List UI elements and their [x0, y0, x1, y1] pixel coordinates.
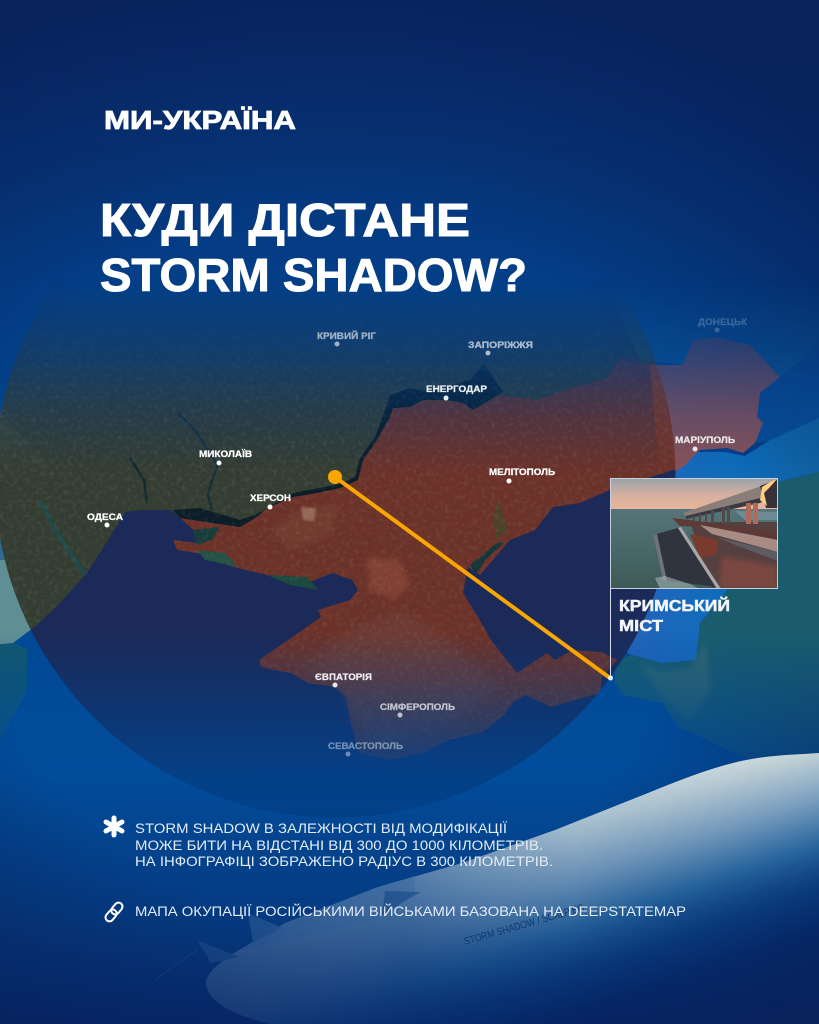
- city: Kherson: ХЕРСОН: [250, 493, 291, 504]
- logo: МИ-УКРАЇНА: [104, 107, 296, 135]
- Dnipro liman and Kakhovka reservoir: [172, 364, 503, 527]
- body seam: [352, 876, 415, 898]
- Taman and Kuban land: [615, 472, 819, 754]
- teal wetlands: [193, 527, 220, 545]
- tail fin: [248, 913, 283, 943]
- occupied east: [650, 337, 780, 480]
- north-east free land: [648, 323, 819, 377]
- callout label: [619, 596, 730, 635]
- city: Donetsk: [698, 317, 747, 332]
- city: Mykolaiv: МИКОЛАЇВ: [199, 449, 252, 460]
- city: Sevastopol: [328, 741, 403, 756]
- occupied south Ukraine and Crimea: [173, 358, 700, 760]
- note: range: [106, 818, 553, 869]
- icon: link: [104, 901, 124, 923]
- title: STORM SHADOW?: [100, 249, 527, 301]
- callout label: КРИМСЬКИЙ: [619, 596, 730, 615]
- rivers: [178, 413, 218, 510]
- map layer: outside strike radius: [0, 323, 819, 754]
- city: Simferopol: СІМФЕРОПОЛЬ: [380, 702, 455, 713]
- note text: НА ІНФОГРАФІЦІ ЗОБРАЖЕНО РАДІУС В 300 КІЛОМЕТРІВ.: [135, 854, 553, 869]
- city: Odesa: ОДЕСА: [87, 512, 123, 523]
- Sea of Azov: [627, 418, 819, 663]
- city: Odesa: [87, 512, 123, 528]
- rear fin: [197, 940, 239, 963]
- city: Mykolaiv: [199, 449, 252, 466]
- inscription on missile: STORM SHADOW / SCALP EG: [463, 902, 586, 948]
- city: Kryvyi Rih: КРИВИЙ РІГ: [317, 330, 377, 342]
- radius disc shade: [108, 728, 564, 818]
- city: Melitopol: [489, 467, 555, 484]
- city: Yevpatoria: ЄВПАТОРІЯ: [315, 672, 372, 683]
- city: Mariupol: [675, 435, 735, 452]
- map layer: inside strike radius: [0, 304, 676, 774]
- note text: МОЖЕ БИТИ НА ВІДСТАНІ ВІД 300 ДО 1000 КІЛОМЕТРІВ.: [135, 838, 543, 853]
- city: Enerhodar: [426, 384, 488, 400]
- body slit: [382, 891, 421, 915]
- missile illustration: [155, 753, 819, 1024]
- icon: asterisk: [106, 818, 122, 835]
- note: source: [104, 901, 686, 923]
- sea: [30, 470, 673, 774]
- city: Donetsk: ДОНЕЦЬК: [698, 317, 747, 328]
- city: Melitopol: МЕЛІТОПОЛЬ: [489, 467, 555, 478]
- note text: [135, 821, 553, 869]
- antenna: [155, 950, 197, 980]
- callout label: МІСТ: [619, 618, 663, 635]
- photo: damaged bridge: [610, 478, 778, 589]
- free Ukraine land: [0, 330, 656, 630]
- callout: Crimean Bridge: [608, 478, 778, 680]
- Bessarabia land, far left: [0, 412, 31, 738]
- city: Enerhodar: ЕНЕРГОДАР: [426, 384, 488, 395]
- source text: МАПА ОКУПАЦІЇ РОСІЙСЬКИМИ ВІЙСЬКАМИ БАЗОВАНА НА DEEPSTATEMAP: [135, 904, 686, 919]
- city: Mariupol: МАРІУПОЛЬ: [675, 435, 735, 446]
- city: Sevastopol: СЕВАСТОПОЛЬ: [328, 741, 403, 752]
- title: [100, 194, 527, 301]
- range line from launch point to Crimean Bridge: [328, 470, 610, 678]
- city: Yevpatoria: [315, 672, 372, 688]
- city labels: [87, 317, 747, 756]
- city: Kryvyi Rih: [317, 330, 377, 346]
- city: Simferopol: [380, 702, 455, 718]
- sea patch east of occupied coast: [648, 470, 676, 478]
- city: Zaporizhzhia: [468, 340, 533, 356]
- Crimean land patches: [322, 617, 469, 698]
- city: Zaporizhzhia: ЗАПОРІЖЖЯ: [468, 340, 533, 351]
- city: Kherson: [250, 493, 291, 510]
- note text: STORM SHADOW В ЗАЛЕЖНОСТІ ВІД МОДИФІКАЦІЇ: [135, 821, 507, 836]
- map: [0, 300, 819, 832]
- title: КУДИ ДІСТАНЕ: [100, 194, 470, 246]
- missile body: [206, 753, 819, 1024]
- land texture: [0, 369, 675, 716]
